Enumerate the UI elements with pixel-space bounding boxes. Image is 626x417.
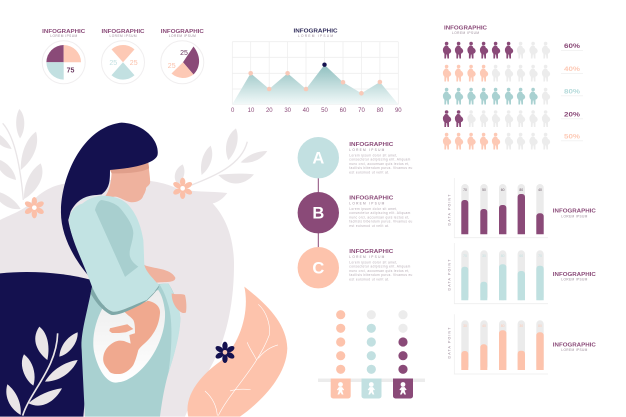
bar chart: peach: INFOGRAPHIC <box>553 342 596 348</box>
axis labels: 40 <box>303 108 310 114</box>
step C: est euismod ut velit at. <box>349 277 389 281</box>
row 80% <box>443 88 583 104</box>
row 40%: 40% <box>564 66 580 73</box>
pie 3: 25 <box>168 63 176 70</box>
pie 1: INFOGRAPHIC <box>42 29 85 35</box>
step B <box>298 192 413 233</box>
pie 2: LOREM IPSUM <box>110 34 137 38</box>
hair highlight <box>79 196 96 201</box>
face <box>103 162 150 202</box>
pie 3: INFOGRAPHIC <box>161 29 204 35</box>
pictogram chart <box>443 26 583 150</box>
line chart <box>231 28 402 114</box>
step C: consectetur adipiscing elit. Aliquam <box>349 265 411 269</box>
axis labels: 90 <box>395 108 402 114</box>
baby tag purple <box>393 378 413 398</box>
bar chart: teal: LOREM IPSUM <box>561 278 588 282</box>
bar chart: teal: INFOGRAPHIC <box>553 272 596 278</box>
fetus arm <box>109 324 133 333</box>
row 80%: 80% <box>564 88 580 95</box>
pie 2 <box>102 29 145 84</box>
step A: nunc orci, accumsan quis lectus et, <box>349 162 409 166</box>
baby tag teal <box>362 378 382 398</box>
step C <box>298 247 413 288</box>
row 50%: 50% <box>564 133 580 140</box>
step B: B <box>312 204 324 222</box>
dress lower <box>81 283 180 417</box>
line chart: INFOGRAPHIC <box>294 28 338 34</box>
axis labels: 50 <box>321 108 328 114</box>
pie 3: LOREM IPSUM <box>169 34 196 38</box>
bar chart: purple: INFOGRAPHIC <box>553 208 596 214</box>
step A: facilisis bibendum purus. Vivamus eu <box>349 166 413 170</box>
row 20% <box>443 110 583 127</box>
row 20%: 20% <box>564 111 580 118</box>
step C: LOREM IPSUM <box>349 255 385 259</box>
pie 2: 25 <box>109 60 117 67</box>
axis labels: 30 <box>284 108 292 114</box>
bar chart: purple <box>448 178 596 238</box>
step B: LOREM IPSUM <box>349 201 385 205</box>
bar chart: peach: DATA POINT <box>448 327 452 358</box>
bar chart: peach: 40 <box>482 324 486 328</box>
bar chart: teal: 30 <box>482 254 486 258</box>
step B: consectetur adipiscing elit. Aliquam <box>349 211 411 215</box>
row 60%: 60% <box>564 43 580 50</box>
bar chart: teal: DATA POINT <box>448 259 452 290</box>
step A <box>298 137 413 178</box>
axis labels: 0 <box>231 108 235 114</box>
step C: facilisis bibendum purus. Vivamus eu <box>349 273 413 277</box>
row 40% <box>443 65 583 82</box>
bar chart: purple: 80 <box>519 188 523 192</box>
step C: INFOGRAPHIC <box>349 249 393 255</box>
peach leaf <box>187 287 287 417</box>
row 50% <box>443 133 583 150</box>
illustration: pregnant woman scene <box>0 109 287 417</box>
bar chart: purple: DATA POINT <box>448 194 452 226</box>
pictogram chart: LOREM IPSUM <box>452 31 479 35</box>
torso <box>77 196 159 305</box>
bar chart: teal <box>448 243 596 304</box>
data points <box>248 71 382 96</box>
bar chart: peach: 30 <box>463 324 467 328</box>
bar chart: peach <box>448 314 596 374</box>
step C: nunc orci, accumsan quis lectus et, <box>349 269 409 273</box>
pie 2: 25 <box>130 60 138 67</box>
sleeve shadow <box>91 285 159 315</box>
step A: A <box>312 150 324 168</box>
step C: Lorem ipsum dolor sit amet, <box>349 260 397 264</box>
step A: consectetur adipiscing elit. Aliquam <box>349 158 411 162</box>
upper hand <box>144 265 175 283</box>
womb <box>93 290 165 383</box>
step B: Lorem ipsum dolor sit amet, <box>349 207 397 211</box>
belly highlight <box>159 283 180 373</box>
axis labels: 10 <box>248 108 255 114</box>
bar chart: purple: LOREM IPSUM <box>561 214 588 218</box>
right grey branch <box>175 128 267 185</box>
dots <box>336 310 408 374</box>
pie 1 <box>42 29 85 84</box>
pie 1: 75 <box>67 68 74 74</box>
sleeve <box>69 204 159 312</box>
bar chart: teal: 80 <box>501 254 505 258</box>
hair <box>61 123 158 280</box>
axis labels: 80 <box>377 108 384 114</box>
step B: INFOGRAPHIC <box>349 196 393 202</box>
bar chart: peach: 30 <box>519 324 523 328</box>
pie 2: INFOGRAPHIC <box>102 29 145 35</box>
step B: est euismod ut velit at. <box>349 224 389 228</box>
lower hand <box>172 293 186 313</box>
bar chart: teal: 70 <box>538 254 542 258</box>
peach flower right <box>172 178 193 199</box>
step B: facilisis bibendum purus. Vivamus eu <box>349 220 413 224</box>
pie 3 <box>161 29 204 84</box>
timeline A B C <box>298 137 413 288</box>
pictogram chart: INFOGRAPHIC <box>444 26 487 32</box>
bar chart: peach: 80 <box>501 324 505 328</box>
step A: INFOGRAPHIC <box>349 142 393 148</box>
fetus <box>103 301 160 374</box>
bar chart: peach: LOREM IPSUM <box>561 348 588 352</box>
line chart: LOREM IPSUM <box>298 34 333 38</box>
step A: est euismod ut velit at. <box>349 170 389 174</box>
pie 3: 25 <box>180 50 188 57</box>
row 60% <box>443 42 583 58</box>
bar chart: purple: 40 <box>538 188 542 192</box>
bar chart: teal: 60 <box>519 254 523 258</box>
area <box>232 65 398 104</box>
axis labels: 20 <box>266 108 273 114</box>
bar chart: peach: 80 <box>538 324 542 328</box>
navy hill <box>0 272 93 417</box>
pie 1: LOREM IPSUM <box>50 34 78 38</box>
dress shadow <box>95 200 138 277</box>
hill leaves <box>6 327 78 416</box>
bar chart: teal: 70 <box>463 254 467 258</box>
left grey branch <box>0 109 42 209</box>
axis labels: 70 <box>358 108 365 114</box>
step A: Lorem ipsum dolor sit amet, <box>349 154 397 158</box>
axis labels <box>231 108 402 114</box>
step C: C <box>312 260 324 278</box>
baby tag peach <box>331 378 351 398</box>
dot chart with baby icons <box>318 310 425 398</box>
step A: LOREM IPSUM <box>349 148 385 152</box>
background blob <box>0 179 234 417</box>
axis labels: 60 <box>340 108 347 114</box>
navy flower <box>214 342 236 363</box>
bar chart: purple: 60 <box>501 188 505 192</box>
bar chart: purple: 70 <box>463 188 467 192</box>
peach flower left <box>24 197 45 218</box>
step B: nunc orci, accumsan quis lectus et, <box>349 215 409 219</box>
bar chart: purple: 50 <box>482 188 486 192</box>
